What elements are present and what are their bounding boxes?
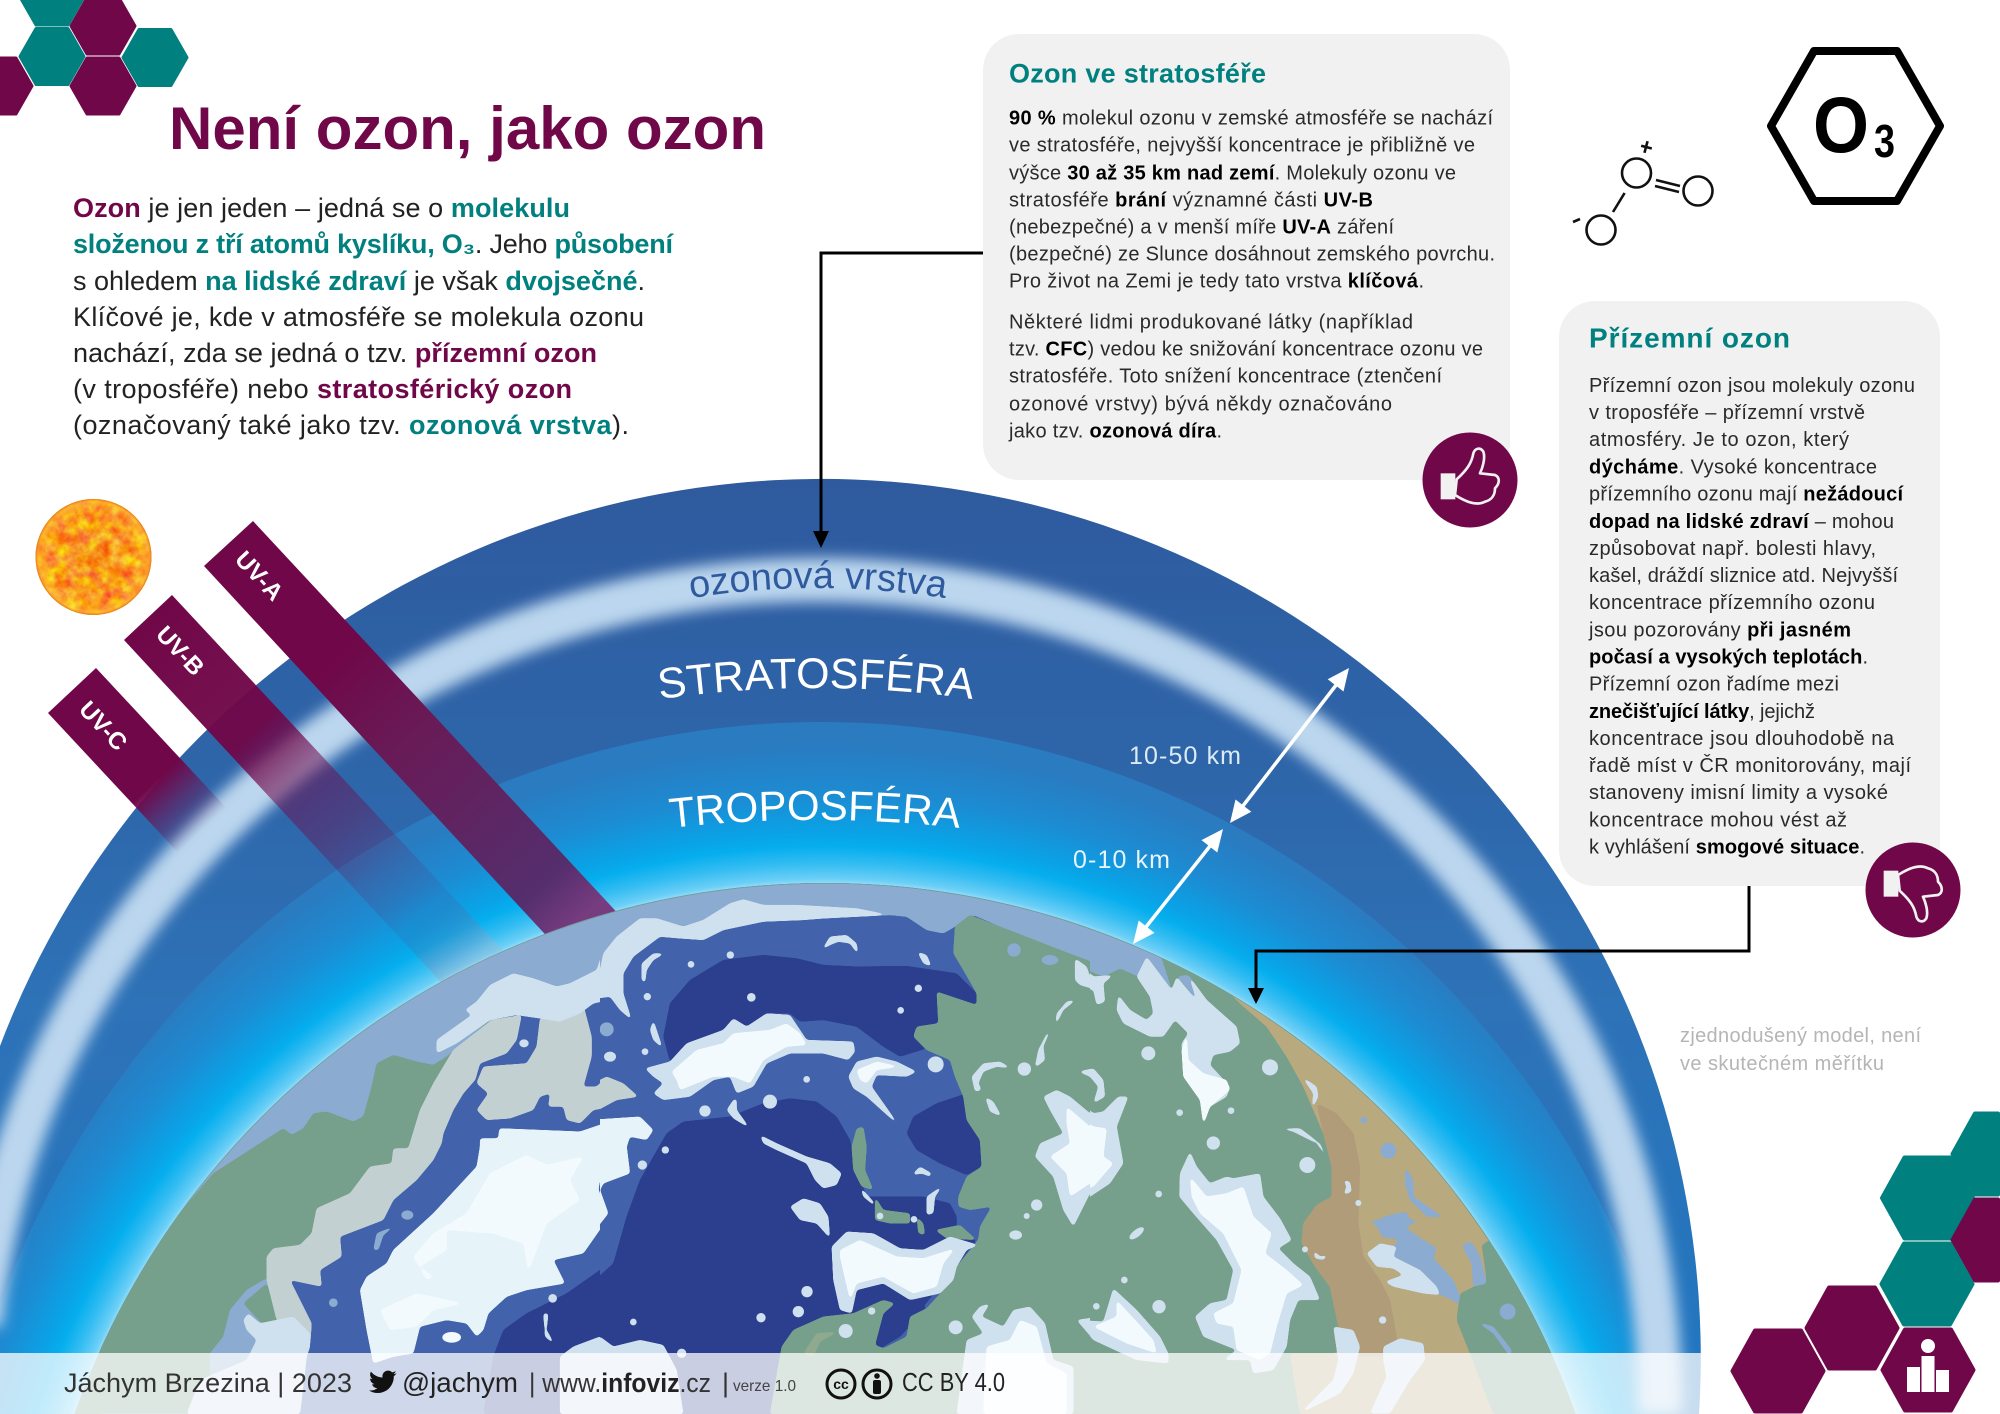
heading: Přízemní ozon xyxy=(1589,322,1790,354)
icon: twitter bird xyxy=(369,1371,397,1393)
body text: k vyhlášení smogové situace. xyxy=(1589,836,1865,858)
icon: person on bar chart xyxy=(1907,1339,1949,1392)
body text xyxy=(1008,108,1495,442)
body text: v troposféře – přízemní vrstvě xyxy=(1589,402,1865,424)
body text: ozonové vrstvy) bývá někdy označováno xyxy=(1009,394,1392,416)
UV-C label: UV-C xyxy=(73,696,132,756)
title: Není ozon, jako ozon xyxy=(169,95,766,162)
O3 symbol: O xyxy=(1813,80,1869,169)
UV-A label: UV-A xyxy=(229,546,288,606)
body text: stratosféře brání významné části UV-B xyxy=(1009,190,1373,212)
body text: atmosféry. Je to ozon, který xyxy=(1589,429,1849,451)
earth eastern part xyxy=(1090,928,1576,1414)
sun xyxy=(36,499,152,615)
label: 0-10 km: 0-10 km xyxy=(1073,846,1170,874)
intro text: Ozon je jen jeden – jedná se o molekulu xyxy=(73,193,570,223)
body text: stratosféře. Toto snížení koncentrace (ztenčení xyxy=(1009,366,1442,388)
body text: řadě míst v ČR monitorovány, mají xyxy=(1589,754,1911,777)
arrow: stratosphere panel to ozone layer xyxy=(813,253,983,548)
hexagon decoration bottom right xyxy=(1732,1114,1998,1412)
icon: O3 hexagon xyxy=(1771,51,1940,201)
body text: způsobovat např. bolesti hlavy, xyxy=(1589,538,1876,560)
panel: ozone in the stratosphere xyxy=(983,34,1518,528)
panel: ground-level ozone xyxy=(1559,301,1960,938)
atmosphere dome xyxy=(0,479,1701,1414)
body text: koncentrace přízemního ozonu xyxy=(1589,592,1875,614)
intro text: složenou z tří atomů kyslíku, O₃. Jeho působení xyxy=(73,229,674,259)
website: | www.infoviz.cz xyxy=(529,1368,711,1398)
intro text: (v troposféře) nebo stratosférický ozon xyxy=(73,374,572,404)
subscript 3: 3 xyxy=(1874,115,1895,167)
stratosphere disc xyxy=(0,479,1701,1414)
body text: 90 % molekul ozonu v zemské atmosféře se nachází xyxy=(1009,108,1493,130)
body text: dopad na lidské zdraví – mohou xyxy=(1589,511,1894,533)
UV-C beam xyxy=(48,668,232,859)
body text: koncentrace mohou vést až xyxy=(1589,810,1847,832)
label: stratosphere: STRATOSFÉRA xyxy=(660,654,972,699)
version number: verze 1.0 xyxy=(733,1378,796,1395)
body text: znečišťující látky, jejichž xyxy=(1589,701,1815,723)
license: CC BY 4.0 xyxy=(902,1367,1005,1397)
body text: (nebezpečné) a v menší míře UV-A záření xyxy=(1009,216,1394,238)
footer bar xyxy=(0,1353,1703,1414)
body text: koncentrace jsou dlouhodobě na xyxy=(1589,728,1895,750)
twitter handle: @jachym xyxy=(402,1367,518,1398)
arrow: ground ozone panel to troposphere xyxy=(1248,886,1749,1004)
body text: dýcháme. Vysoké koncentrace xyxy=(1589,456,1877,478)
body text: Přízemní ozon řadíme mezi xyxy=(1589,674,1839,696)
icon: attribution xyxy=(863,1370,891,1398)
body text: stanoveny imisní limity a vysoké xyxy=(1589,782,1888,804)
scale arrow: troposphere 0-10 km xyxy=(1073,829,1223,944)
intro text xyxy=(73,193,674,440)
icon: creative commons: cc xyxy=(833,1376,849,1392)
body text: Některé lidmi produkované látky (například xyxy=(1009,312,1413,334)
intro text: s ohledem na lidské zdraví je však dvojsečné. xyxy=(73,266,645,296)
intro text: Klíčové je, kde v atmosféře se molekula ozonu xyxy=(73,302,644,332)
label: ozone layer: ozonová vrstva xyxy=(690,560,946,598)
planet Earth xyxy=(67,863,1627,1414)
intro text: nachází, zda se jedná o tzv. přízemní ozon xyxy=(73,338,597,368)
heading: Ozon ve stratosféře xyxy=(1009,58,1266,88)
author and year: Jáchym Brzezina | 2023 xyxy=(64,1368,352,1398)
body text: výšce 30 až 35 km nad zemí. Molekuly ozonu ve xyxy=(1009,162,1456,184)
body text: kašel, dráždí sliznice atd. Nejvyšší xyxy=(1589,565,1898,587)
body text: (bezpečné) ze Slunce dosáhnout zemského povrchu. xyxy=(1009,244,1495,266)
UV-B beam xyxy=(124,595,510,992)
intro text: (označovaný také jako tzv. ozonová vrstva). xyxy=(73,410,629,440)
atmosphere layer labels xyxy=(660,560,972,828)
label: troposphere: TROPOSFÉRA xyxy=(668,786,960,828)
scale note: zjednodušený model, není xyxy=(1680,1025,1921,1047)
UV-A beam xyxy=(204,521,624,945)
body text: ve stratosféře, nejvyšší koncentrace je přibližně ve xyxy=(1009,134,1475,156)
hexagon decoration top left xyxy=(0,0,187,114)
body text: počasí a vysokých teplotách. xyxy=(1589,646,1868,668)
earth central part xyxy=(600,883,1090,1414)
earth west part xyxy=(100,916,600,1414)
body text: tzv. CFC) vedou ke snižování koncentrace ozonu ve xyxy=(1009,338,1483,360)
molecule structure diagram xyxy=(1573,141,1712,244)
label: 10-50 km: 10-50 km xyxy=(1129,742,1241,770)
body text: jako tzv. ozonová díra. xyxy=(1008,420,1222,442)
body text xyxy=(1588,375,1915,858)
icon: thumbs down xyxy=(1866,842,1960,938)
ozone layer band xyxy=(0,580,1660,1414)
body text: Pro život na Zemi je tedy tato vrstva klíčová. xyxy=(1009,270,1424,292)
scale arrow: stratosphere 10-50 km xyxy=(1129,668,1349,823)
scale note xyxy=(1680,1025,1921,1075)
scale note: ve skutečném měřítku xyxy=(1680,1053,1884,1075)
body text: přízemního ozonu mají nežádoucí xyxy=(1589,484,1904,506)
version separator: | xyxy=(722,1368,729,1398)
icon: creative commons xyxy=(827,1370,855,1398)
body text: jsou pozorovány při jasném xyxy=(1588,620,1851,642)
icon: thumbs up xyxy=(1422,432,1518,528)
troposphere layer xyxy=(0,722,1674,1414)
body text: Přízemní ozon jsou molekuly ozonu xyxy=(1589,375,1915,397)
UV-B label: UV-B xyxy=(150,621,209,681)
